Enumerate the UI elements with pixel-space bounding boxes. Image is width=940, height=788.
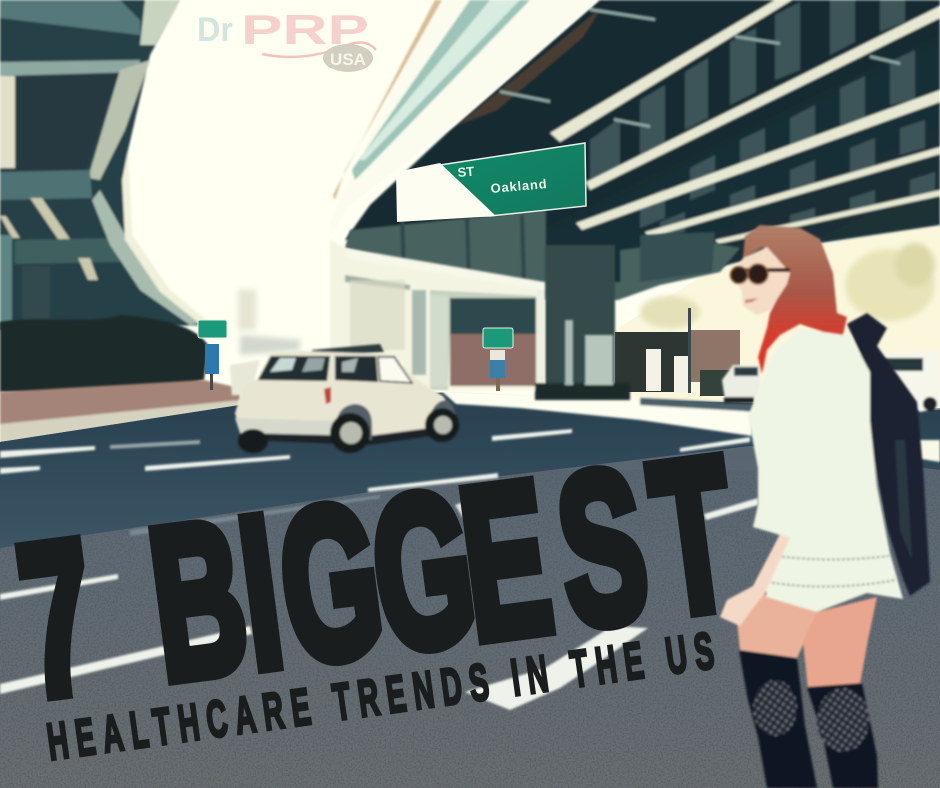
headline: 7 BIGGEST: B bbox=[139, 476, 259, 726]
left sock bbox=[739, 650, 817, 788]
distant haze and trees bbox=[238, 290, 380, 355]
logo: Dr PRP USA: Dr bbox=[197, 11, 233, 49]
headline: 7 BIGGEST: G bbox=[360, 447, 487, 697]
green highway sign: Oakland: ST bbox=[457, 164, 475, 180]
right sock bbox=[807, 683, 878, 788]
road bbox=[0, 392, 940, 788]
side window bbox=[335, 356, 378, 382]
green highway sign: Oakland: Oakland bbox=[490, 176, 548, 196]
rear window bbox=[258, 356, 330, 381]
dress lace trim bbox=[767, 556, 896, 587]
center road signs bbox=[483, 328, 513, 391]
headline: 7 BIGGEST: T bbox=[640, 413, 747, 661]
background van bbox=[878, 350, 940, 412]
subheading: Healthcare Trends in the US: HEALTHCARE TRENDS IN THE US bbox=[44, 621, 717, 771]
hair bbox=[743, 225, 847, 374]
ramp white band bbox=[330, 0, 598, 235]
headline: 7 BIGGEST: E bbox=[449, 437, 562, 685]
face bbox=[733, 247, 790, 315]
logo badge bbox=[323, 44, 373, 72]
logo badge: USA bbox=[330, 50, 366, 69]
road glare bbox=[440, 390, 940, 462]
woman bbox=[720, 225, 930, 788]
dress bbox=[748, 328, 903, 612]
logo: Dr PRP USA bbox=[197, 6, 376, 72]
jacket bbox=[847, 313, 930, 596]
car body bbox=[235, 351, 455, 440]
wheels bbox=[330, 413, 370, 453]
road markings bbox=[0, 429, 758, 710]
headline: 7 BIGGEST: I bbox=[228, 472, 294, 714]
ground strip bbox=[0, 360, 260, 444]
headline: 7 BIGGEST: G bbox=[267, 459, 394, 709]
green highway sign: Oakland bbox=[396, 143, 586, 222]
left bushes bbox=[0, 315, 208, 395]
dark traffic lanes bbox=[0, 392, 940, 548]
windshield bbox=[378, 357, 412, 383]
right overpass deck bbox=[345, 0, 940, 290]
left overpass bbox=[0, 0, 212, 330]
background SUV bbox=[722, 365, 760, 403]
sunglasses bbox=[730, 264, 790, 284]
right leg bbox=[803, 597, 877, 690]
headline: 7 BIGGEST: S bbox=[546, 424, 659, 673]
lower building frame bbox=[330, 240, 630, 400]
headline: 7 BIGGEST: 7 bbox=[8, 496, 108, 743]
logo: Dr PRP USA: PRP bbox=[241, 6, 369, 53]
left road signs bbox=[198, 320, 227, 390]
pale girders bbox=[550, 0, 940, 244]
right background bbox=[615, 222, 940, 420]
lower wall bbox=[345, 210, 740, 385]
left leg bbox=[737, 590, 817, 658]
arm and hand bbox=[720, 534, 790, 626]
white car bbox=[235, 344, 459, 453]
girder panels bbox=[590, 0, 935, 240]
underdeck rust bbox=[458, 7, 602, 125]
road grain bbox=[0, 470, 940, 788]
